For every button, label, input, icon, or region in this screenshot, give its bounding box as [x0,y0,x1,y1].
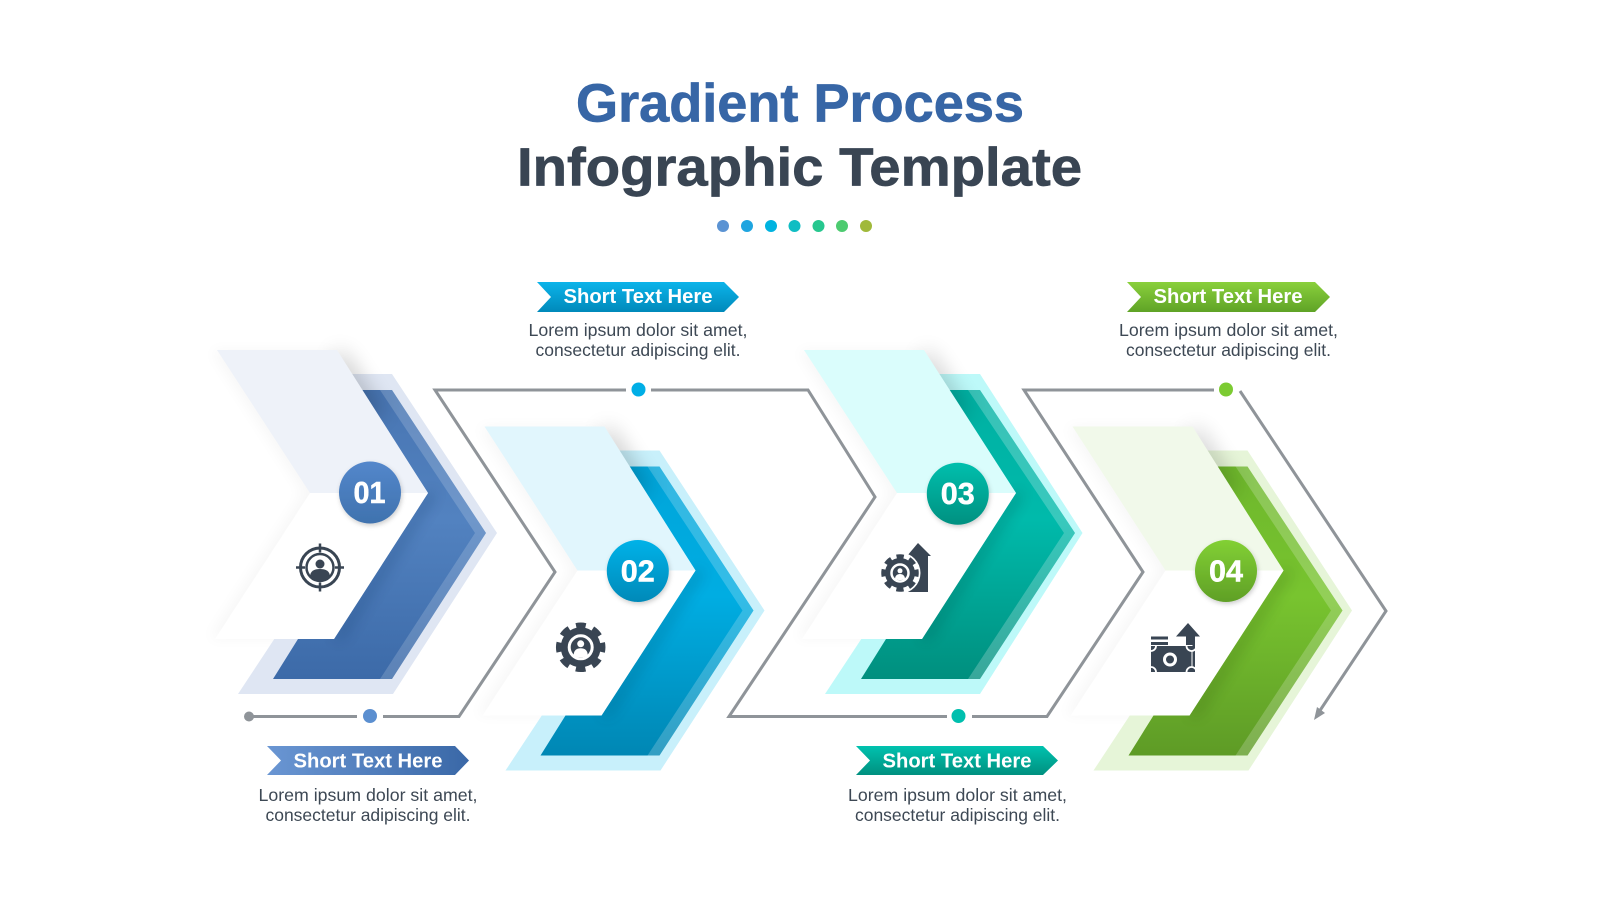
number badge 01: 01 [354,475,386,510]
number badge 04 [1195,540,1257,602]
title: Infographic Template [517,138,1082,198]
number badge 04: 04 [1209,554,1244,588]
number badge 02 [607,540,669,602]
chevron 01 [209,350,497,694]
label 03: consectetur adipiscing elit. [855,805,1060,825]
label 01: Lorem ipsum dolor sit amet, [258,785,478,805]
number badge 02: 02 [621,554,655,588]
icon: money with growth arrow [1151,623,1200,672]
title [517,74,1082,198]
icon: target person [296,544,344,592]
number badge 03 [927,463,989,525]
label 04: Short Text Here [1154,285,1302,308]
title dots [717,220,872,232]
label 03 [848,746,1067,825]
label 01 [258,746,478,825]
connector path [244,382,1386,723]
chevron 03 [796,350,1082,694]
chevron 04 [1064,426,1352,770]
title: Gradient Process [576,74,1024,134]
label 02: Short Text Here [564,285,712,308]
label 03: Short Text Here [882,750,1032,772]
icon: gear with growth arrow [880,543,931,594]
label 02: consectetur adipiscing elit. [536,340,740,360]
icon: gear person [559,626,602,669]
number badge 03: 03 [941,476,975,511]
label 01: Short Text Here [294,750,442,772]
label 03: Lorem ipsum dolor sit amet, [848,785,1067,805]
chevron 02 [476,426,764,770]
label 04 [1119,282,1338,360]
label 02: Lorem ipsum dolor sit amet, [528,320,748,340]
label 02 [528,282,748,360]
label 04: consectetur adipiscing elit. [1126,340,1331,360]
label 01: consectetur adipiscing elit. [266,805,470,825]
number badge 01 [339,462,401,524]
label 04: Lorem ipsum dolor sit amet, [1119,320,1338,340]
